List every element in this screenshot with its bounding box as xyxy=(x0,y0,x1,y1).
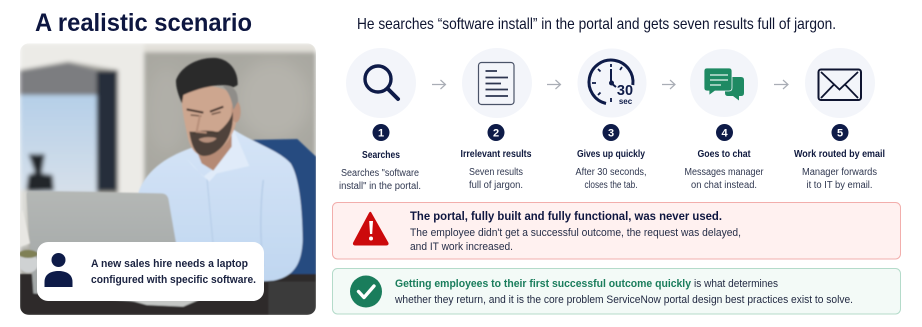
failure text: and IT work increased. xyxy=(410,241,513,253)
step 1: searches: 1 xyxy=(378,128,384,140)
step 3: gives up quickly: closes the tab. xyxy=(584,180,638,191)
caption text xyxy=(91,258,256,286)
icon: magnifying glass xyxy=(365,66,398,99)
face xyxy=(182,86,236,156)
icon: person xyxy=(44,253,72,287)
step 5: work routed by email: Work routed by email xyxy=(794,149,885,160)
caption text: A new sales hire needs a laptop xyxy=(91,258,249,270)
step 3: gives up quickly: After 30 seconds, xyxy=(576,167,646,178)
insight text: Getting employees to their first successful outcome quickly xyxy=(395,278,692,290)
step 4: goes to chat xyxy=(684,49,764,191)
step 5: work routed by email xyxy=(794,48,885,191)
icon: warning triangle xyxy=(353,212,388,245)
step 2: irrelevant results: Seven results xyxy=(469,167,523,178)
failure text: The portal, fully built and fully functional, was never used. xyxy=(410,209,722,223)
step 4: goes to chat: Messages manager xyxy=(684,167,764,178)
failure text xyxy=(410,209,741,253)
collar xyxy=(204,132,248,181)
step 4: goes to chat: on chat instead. xyxy=(691,180,757,191)
step 4: goes to chat: Goes to chat xyxy=(698,149,751,160)
caption text: configured with specific software. xyxy=(91,274,256,286)
icon: chat bubbles xyxy=(704,68,744,100)
step 3: gives up quickly xyxy=(576,48,646,191)
insight text: whether they return, and it is the core problem ServiceNow portal design best practices exist to solve. xyxy=(394,294,853,306)
step 3: gives up quickly: 3 xyxy=(608,128,614,140)
step 1: searches: Searches "software xyxy=(341,168,419,179)
arrow 1 to 2 xyxy=(432,80,446,89)
neck xyxy=(198,134,232,171)
arrow 2 to 3 xyxy=(547,80,560,89)
step 1: searches: Searches xyxy=(362,150,400,161)
step 2: irrelevant results: 2 xyxy=(493,128,499,140)
title: A realistic scenario xyxy=(35,9,252,37)
ear xyxy=(231,101,241,122)
bowl and glass xyxy=(21,214,30,246)
icon: green check xyxy=(350,276,382,308)
icon: envelope xyxy=(818,70,861,100)
icon: clock with 30 sec: 30 xyxy=(617,83,633,99)
beard xyxy=(189,112,233,156)
arrow 4 to 5 xyxy=(774,80,788,89)
laptop xyxy=(27,191,177,305)
hair xyxy=(176,58,238,103)
insight text: is what determines xyxy=(694,278,778,290)
callout: success insight xyxy=(332,268,900,314)
icon: clock with 30 sec xyxy=(589,60,633,106)
table xyxy=(20,274,316,315)
step 5: work routed by email: 5 xyxy=(837,128,843,140)
callout: failure outcome xyxy=(332,202,900,259)
step 1: searches xyxy=(339,48,421,192)
step 2: irrelevant results: Irrelevant results xyxy=(460,149,532,160)
shirt xyxy=(138,129,303,283)
chair xyxy=(252,138,316,275)
caption card xyxy=(37,242,264,301)
insight text xyxy=(394,278,853,306)
step 5: work routed by email: it to IT by email. xyxy=(806,180,872,191)
step 5: work routed by email: Manager forwards xyxy=(802,167,877,178)
failure text: The employee didn't get a successful outcome, the request was delayed, xyxy=(410,227,741,239)
step 4: goes to chat: 4 xyxy=(721,128,728,140)
icon: clock with 30 sec: sec xyxy=(619,97,633,106)
icon: document xyxy=(478,62,514,104)
step 2: irrelevant results xyxy=(460,48,532,191)
photo: employee working at a laptop xyxy=(18,43,316,315)
step 2: irrelevant results: full of jargon. xyxy=(469,180,523,191)
grey temple xyxy=(223,86,238,110)
brows and eyes xyxy=(187,107,223,113)
step 1: searches: install" in the portal. xyxy=(339,181,421,192)
step 3: gives up quickly: Gives up quickly xyxy=(577,149,646,160)
arrow 3 to 4 xyxy=(662,80,675,89)
subheading: He searches “software install” in the portal and gets seven results full of jargon. xyxy=(357,16,836,33)
